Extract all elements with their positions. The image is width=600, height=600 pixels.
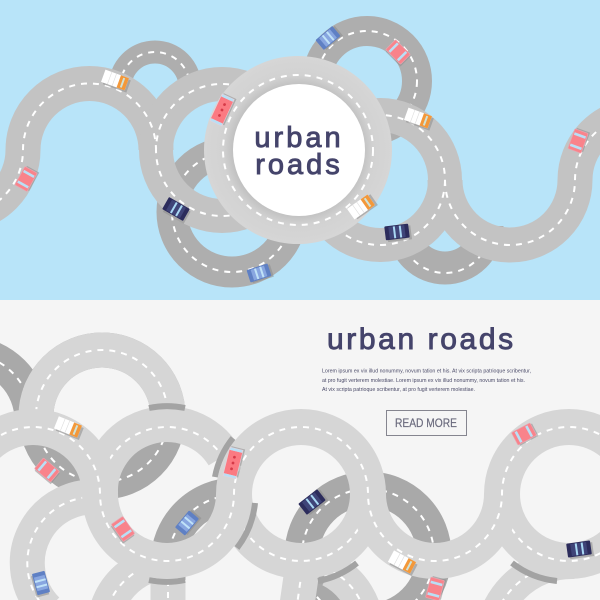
light mid roads and shadow strips — [27, 350, 600, 600]
body text: Lorem ipsum ex vix illud nonummy, novum tation et his. At vix scripta patrioque scribentur, — [322, 368, 531, 374]
body text: At vix scripta patrioque scribentur, at pro fugit verterem molestiae. — [322, 387, 475, 393]
panel: light grey banner — [0, 300, 600, 600]
heading: urban roads: urban roads — [327, 323, 516, 356]
title: urban roads (circle): urban — [254, 122, 344, 154]
back roads: dark loops — [120, 31, 490, 273]
panel: sky blue banner — [0, 0, 600, 300]
cars: bottom banner — [30, 416, 594, 600]
body text — [322, 368, 531, 393]
road network: front grey roads — [0, 84, 600, 245]
body text: at pro fugit verterem molestiae. Lorem ipsum ex vix illud nonummy, novum tation et his. — [322, 378, 525, 384]
button: read more: READ MORE — [395, 418, 457, 430]
central roundabout with title: roads — [255, 149, 343, 181]
button: read more — [386, 410, 466, 436]
cars: top banner — [15, 25, 590, 284]
dark under-roads — [0, 350, 434, 600]
front wave road — [0, 427, 600, 561]
dashes on dark roads — [0, 350, 434, 600]
central roundabout with title — [204, 56, 392, 244]
